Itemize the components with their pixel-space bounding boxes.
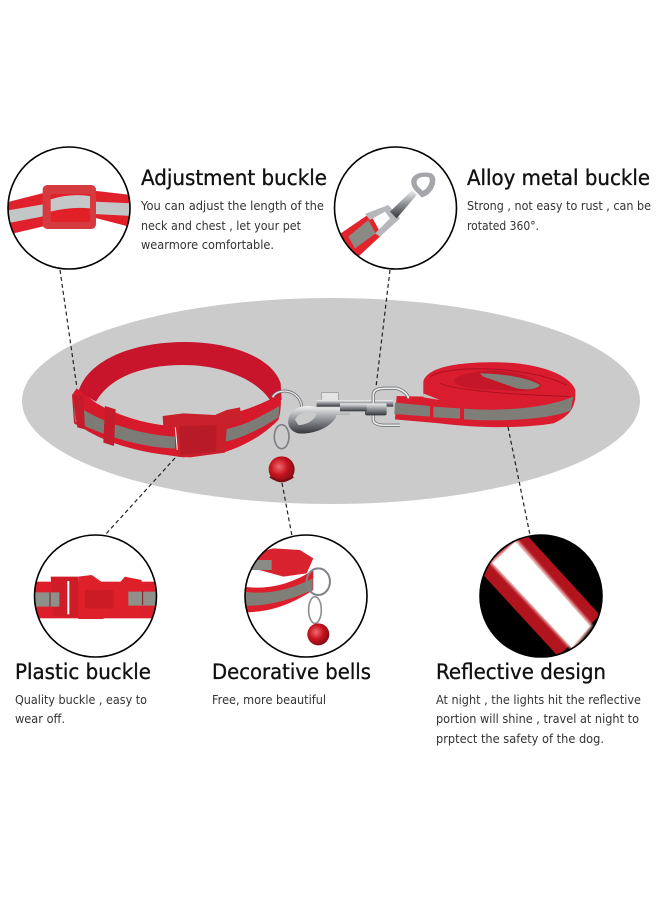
leash coil (395, 362, 575, 427)
text: plastic buckle (15, 692, 147, 726)
text: alloy metal buckle: rotated 360°. (467, 218, 539, 233)
snap hook (288, 393, 393, 434)
circle: adjustment buckle (7, 147, 132, 269)
reflective stripe (394, 397, 573, 420)
text: reflective design: prptect the safety of the dog. (436, 731, 604, 746)
reflective stripe (74, 405, 279, 449)
circle: plastic buckle (33, 535, 158, 657)
metal ring (273, 391, 302, 420)
circle: decorative bells (243, 535, 367, 657)
leash (340, 362, 575, 427)
text: adjustment buckle: You can adjust the length of the (140, 198, 324, 213)
heading: plastic buckle: Plastic buckle (15, 660, 151, 684)
text: alloy metal buckle (467, 198, 651, 233)
text: adjustment buckle: wearmore comfortable. (141, 237, 274, 252)
heading: alloy metal buckle: Alloy metal buckle (467, 166, 650, 190)
text: reflective design: At night , the lights hit the reflective (436, 692, 641, 707)
text: decorative bells: Free, more beautiful (212, 692, 326, 707)
heading: adjustment buckle: Adjustment buckle (141, 166, 327, 190)
text: plastic buckle: Quality buckle , easy to (15, 692, 147, 707)
text: adjustment buckle: neck and chest , let your pet (141, 218, 301, 233)
text: plastic buckle: wear off. (15, 711, 65, 726)
collar with bell (72, 342, 302, 482)
collar back band (78, 342, 282, 402)
grey ellipse backdrop (22, 298, 640, 504)
swivel loop (373, 388, 408, 425)
adjuster slider (73, 395, 116, 446)
text: reflective design (436, 692, 641, 746)
circle: alloy metal buckle (334, 147, 456, 269)
bell (269, 456, 295, 482)
text: reflective design: portion will shine , travel at night to (436, 711, 639, 726)
collar front band (72, 388, 281, 457)
plastic buckle (163, 407, 242, 457)
circle: reflective design (477, 532, 607, 662)
dashed connector lines (60, 270, 530, 536)
heading: reflective design: Reflective design (436, 660, 606, 684)
heading: decorative bells: Decorative bells (212, 660, 371, 684)
text: adjustment buckle (140, 198, 324, 252)
bell ring (274, 425, 289, 449)
